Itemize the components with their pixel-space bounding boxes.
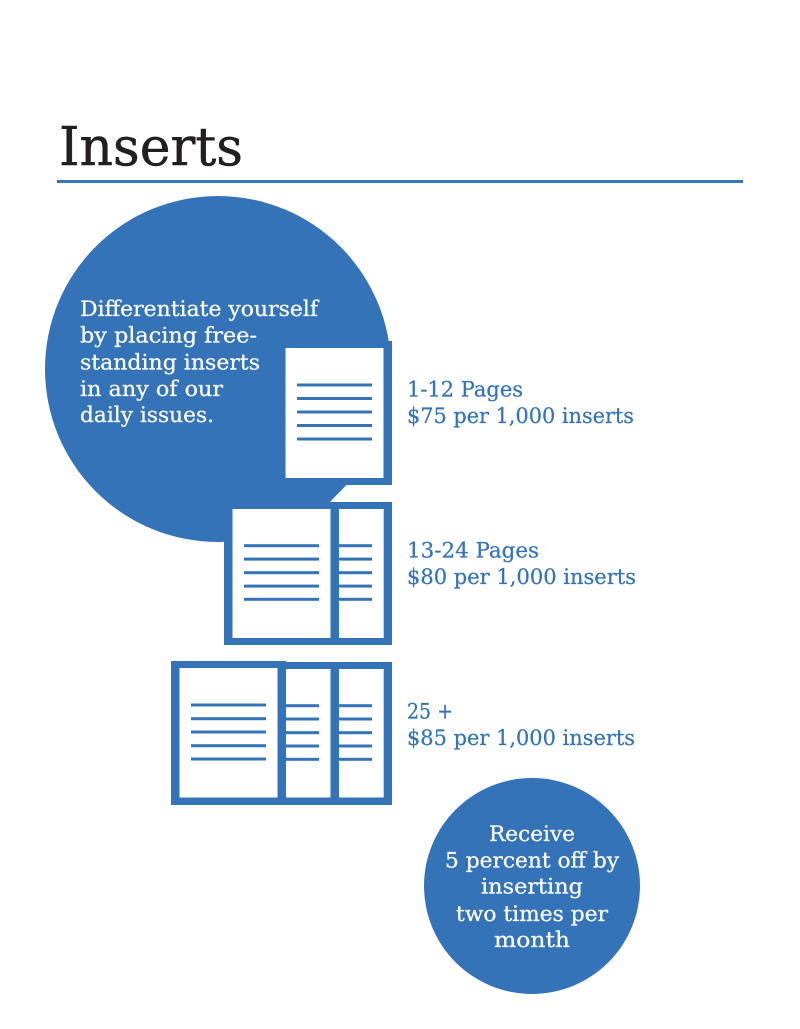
large circle callout: [45, 196, 391, 542]
discount circle: Receive: [489, 822, 575, 847]
price: 1-12 pages: 1-12 Pages: [407, 378, 523, 402]
icon: two page insert: [224, 502, 392, 645]
price: 25+ pages: 25 +: [407, 700, 453, 724]
intro text: [80, 297, 320, 428]
icon: single page insert: [285, 341, 392, 502]
intro text: in any of our: [80, 377, 224, 402]
price: 13-24 pages: [407, 538, 636, 590]
discount circle: inserting: [481, 875, 583, 900]
discount circle: two times per: [456, 902, 609, 927]
intro text: daily issues.: [80, 403, 214, 428]
price: 13-24 pages: $80 per 1,000 inserts: [407, 565, 636, 590]
title: Inserts: [59, 115, 243, 178]
price: 25+ pages: $85 per 1,000 inserts: [407, 726, 635, 751]
intro text: by placing free-: [80, 324, 257, 348]
price: 1-12 pages: [407, 378, 634, 429]
discount circle: [424, 778, 640, 994]
title underline: [57, 180, 743, 183]
price: 25+ pages: [407, 700, 635, 751]
discount circle: 5 percent off by: [445, 848, 620, 873]
discount circle: month: [494, 928, 570, 953]
price: 1-12 pages: $75 per 1,000 inserts: [407, 404, 634, 429]
intro text: standing inserts: [80, 350, 260, 375]
intro text: Differentiate yourself: [80, 297, 320, 322]
price: 13-24 pages: 13-24 Pages: [407, 538, 539, 564]
icon: three page insert: [171, 661, 392, 805]
